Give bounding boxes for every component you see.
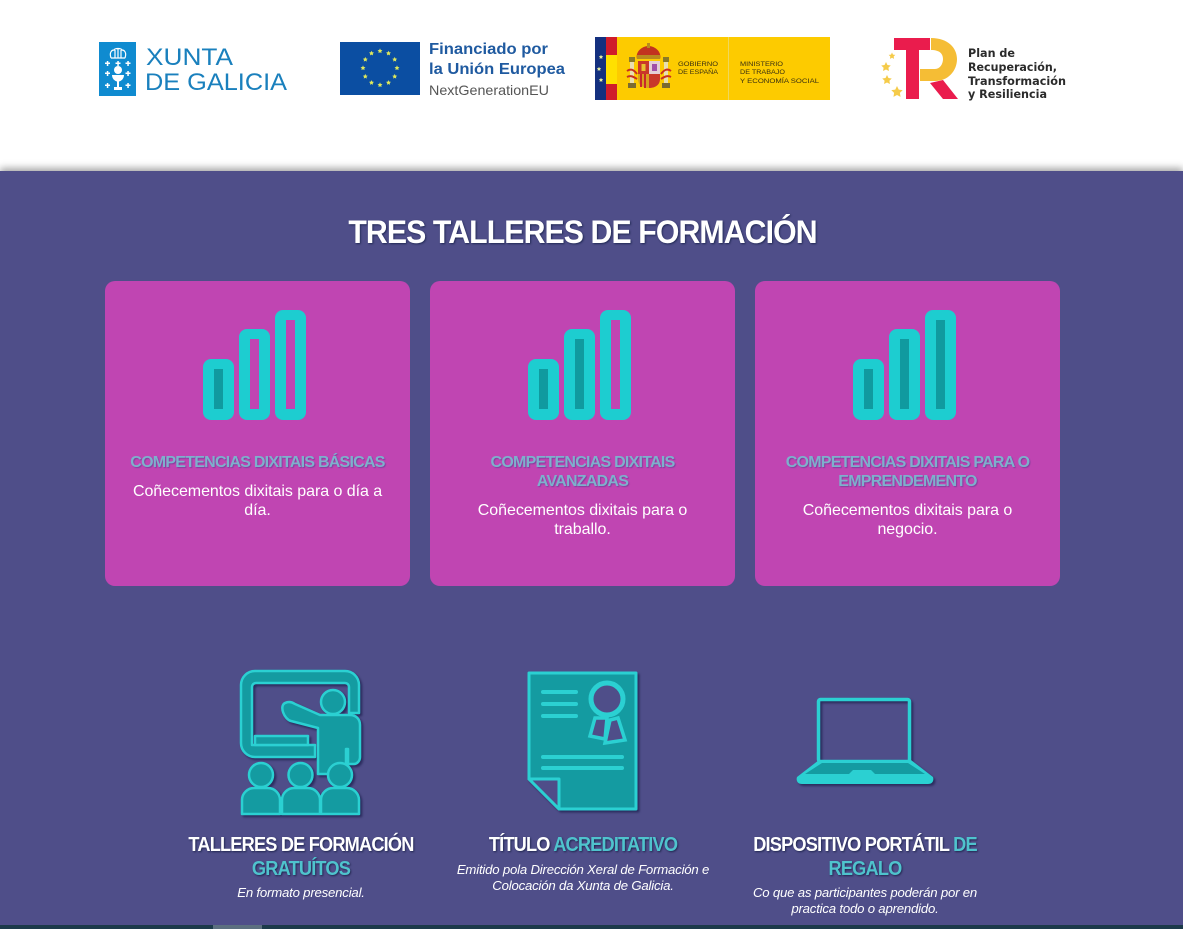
logo: Gobierno de España: MINISTERIO bbox=[740, 61, 783, 68]
logo: Gobierno de España: DE ESPAÑA bbox=[678, 67, 718, 76]
logo: Plan de Recuperación: y Resiliencia bbox=[968, 87, 1047, 101]
feature description: Emitido pola Dirección Xeral de Formación e Colocación da Xunta de Galicia. bbox=[457, 862, 709, 892]
logo: Financiado por la Unión Europea: Financiado por bbox=[429, 41, 548, 58]
logo: Xunta de Galicia bbox=[99, 42, 288, 96]
icon: bar level 2 bbox=[528, 310, 631, 420]
card description: Coñecementos dixitais para o día a día. bbox=[133, 483, 382, 519]
icon: laptop bbox=[796, 698, 936, 787]
card title: COMPETENCIAS DIXITAIS BÁSICAS bbox=[130, 454, 385, 471]
logo: Plan de Recuperación bbox=[881, 38, 1066, 101]
logo: Xunta de Galicia: DE GALICIA bbox=[145, 69, 288, 96]
feature description: En formato presencial. bbox=[237, 885, 365, 900]
card title: COMPETENCIAS DIXITAIS PARA O EMPRENDEMENTO bbox=[786, 454, 1029, 490]
bottom strip bbox=[0, 925, 1183, 929]
feature: talleres gratuítos bbox=[188, 832, 415, 900]
feature heading: TÍTULO ACREDITATIVO bbox=[489, 834, 677, 856]
logo: Xunta de Galicia: XUNTA bbox=[146, 44, 234, 71]
logo: Financiado por la Unión Europea bbox=[340, 41, 566, 98]
feature heading: DISPOSITIVO PORTÁTIL DE REGALO bbox=[753, 834, 977, 880]
feature: dispositivo portátil bbox=[753, 833, 978, 916]
card title: COMPETENCIAS DIXITAIS AVANZADAS bbox=[491, 454, 674, 490]
logo: Gobierno de España: DE TRABAJO bbox=[740, 69, 785, 76]
feature heading: TALLERES DE FORMACIÓN GRATUÍTOS bbox=[188, 834, 414, 880]
logo: Gobierno de España: GOBIERNO bbox=[678, 61, 718, 68]
panel: competencias emprendemento bbox=[755, 281, 1060, 586]
coat of arms bbox=[627, 43, 671, 88]
icon: teacher and students bbox=[240, 670, 364, 818]
card description: Coñecementos dixitais para o negocio. bbox=[803, 502, 1012, 538]
icon: certificate bbox=[528, 672, 640, 814]
logo: Financiado por la Unión Europea: la Unión Europea bbox=[429, 61, 565, 78]
logo: Plan de Recuperación: Transformación bbox=[968, 74, 1066, 88]
logo: Plan de Recuperación: Recuperación, bbox=[968, 60, 1057, 74]
panel: competencias avanzadas bbox=[430, 281, 735, 586]
title: TRES TALLERES DE FORMACIÓN bbox=[348, 214, 817, 250]
logo: Plan de Recuperación: Plan de bbox=[968, 46, 1015, 60]
logo: Financiado por la Unión Europea: NextGenerationEU bbox=[429, 82, 549, 98]
logo: Gobierno de España bbox=[595, 37, 830, 100]
logo: Gobierno de España: Y ECONOMÍA SOCIAL bbox=[740, 76, 819, 85]
panel: competencias básicas bbox=[105, 281, 410, 586]
icon: bar level 1 bbox=[203, 310, 306, 420]
feature description: Co que as participantes poderán por en practica todo o aprendido. bbox=[753, 885, 977, 916]
icon: bar level 3 bbox=[853, 310, 956, 420]
card description: Coñecementos dixitais para o traballo. bbox=[478, 502, 687, 538]
feature: título acreditativo bbox=[457, 833, 709, 892]
